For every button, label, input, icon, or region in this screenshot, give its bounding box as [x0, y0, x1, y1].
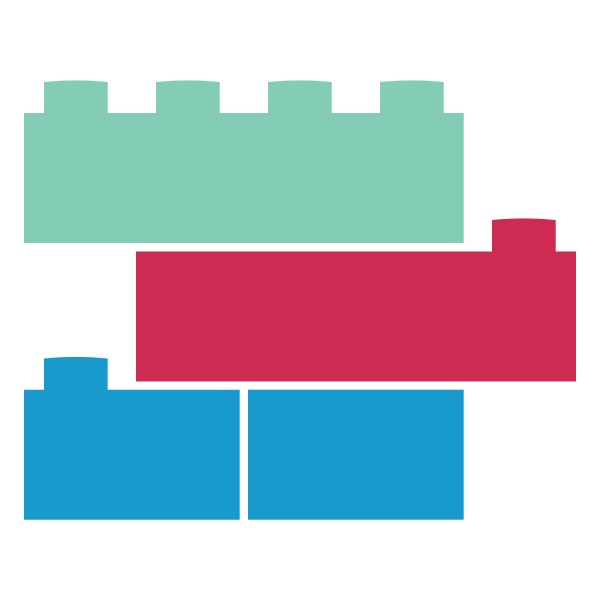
- brick: blue flat brick, right: [248, 390, 464, 520]
- brick: blue one-stud brick, left: [24, 357, 240, 520]
- brick: red one-stud brick: [136, 218, 576, 382]
- brick: green four-stud brick: [24, 80, 464, 243]
